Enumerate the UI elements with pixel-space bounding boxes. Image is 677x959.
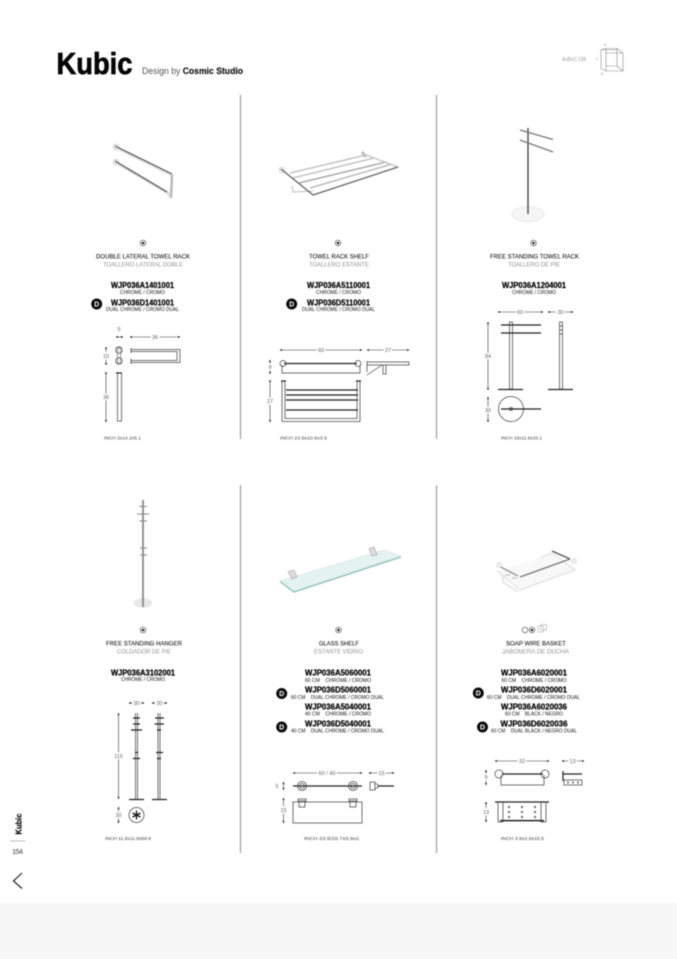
technical drawing: 36	[103, 395, 109, 401]
technical drawing: 10	[103, 354, 109, 360]
designer credit: Design by Cosmic Studio	[142, 66, 243, 76]
dimension key: B	[601, 72, 604, 76]
product codes: D	[480, 724, 485, 732]
finish icon	[140, 627, 146, 633]
dimension key: A	[604, 43, 607, 47]
product codes: 60 CM CHROME / CROMO	[502, 678, 567, 684]
technical drawing: 5	[275, 784, 279, 790]
product name: COLGADOR DE PIE	[117, 648, 171, 656]
product name: TOWEL RACK SHELF	[309, 254, 369, 260]
technical drawing: 9	[268, 365, 272, 371]
technical drawing: 36	[152, 335, 158, 341]
technical drawing: 84	[485, 354, 491, 360]
product codes: WJP036D6020036	[500, 720, 568, 728]
product codes: 60 CM DUAL CHROME / CROMO DUAL	[487, 695, 580, 701]
product codes: WJP036A5060001	[305, 668, 372, 678]
technical drawing: 30	[115, 813, 122, 819]
product codes: 60 CM BLACK / NEGRO	[505, 712, 563, 718]
inch dimensions: INCH 23.6/15.7x5.9x2	[304, 836, 359, 842]
inch dimensions: INCH 23.6x10.6x3.5	[280, 436, 327, 442]
technical drawing	[267, 348, 409, 422]
product codes: D	[279, 724, 284, 732]
product name: SOAP WIRE BASKET	[506, 640, 566, 648]
bottom band	[0, 903, 677, 959]
product name: TOALLERO DE PIE	[508, 262, 560, 268]
finish icon	[336, 627, 341, 633]
product codes: 60 CM CHROME / CROMO	[305, 678, 371, 684]
product codes: WJP036D6020001	[501, 686, 568, 694]
product code	[502, 281, 567, 296]
product name: GLASS SHELF	[319, 640, 359, 648]
inch dimensions: INCH 11.8x11.8x68.9	[105, 836, 151, 842]
dimension key: C	[596, 57, 599, 61]
product codes: WJP036D5110001	[307, 298, 371, 308]
technical drawing: 15	[280, 808, 287, 814]
product codes: 60 CM DUAL BLACK / NEGRO DUAL	[491, 728, 577, 734]
product codes: D	[476, 690, 481, 698]
technical drawing: 32	[519, 759, 525, 765]
technical drawing: 27	[385, 348, 391, 354]
product image: free standing towel rack	[512, 128, 553, 222]
product name: TOALLERO LATERAL DOBLE	[103, 262, 183, 268]
technical drawing	[483, 759, 584, 822]
dimension key: AxBxC CM	[562, 57, 586, 63]
inch dimensions: INCH 3.9x2.6x15.5	[501, 836, 544, 842]
product name: ESTANTE VIDRIO	[314, 648, 363, 656]
inch dimensions: INCH 2x14.2x5.1	[104, 436, 141, 442]
technical drawing: 15	[378, 771, 385, 777]
product name	[314, 640, 363, 656]
panel: free standing hanger	[105, 500, 182, 842]
finish icon	[531, 240, 536, 246]
technical drawing: 30	[557, 310, 564, 316]
product name: JABONERA DE DUCHA	[502, 648, 570, 656]
product codes: 40 CM CHROME / CROMO	[305, 712, 371, 718]
technical drawing: 30	[133, 701, 140, 707]
product codes: WJP036A5040001	[305, 702, 372, 712]
product codes: DUAL CHROME / CROMO DUAL	[302, 307, 375, 313]
product image: glass shelf	[280, 547, 401, 592]
product code: CHROME / CROMO	[512, 290, 556, 296]
product name	[502, 640, 570, 656]
product codes: D	[289, 302, 294, 308]
technical drawing: 30	[485, 408, 491, 414]
product code	[111, 668, 176, 683]
title: Kubic	[56, 46, 132, 81]
technical drawing: 13	[569, 759, 576, 765]
product name	[490, 254, 580, 268]
technical drawing	[103, 327, 180, 422]
technical drawing: 30	[156, 701, 163, 707]
product name	[309, 254, 369, 268]
technical drawing: 60 / 40	[319, 771, 335, 777]
technical drawing: 60	[517, 310, 523, 316]
product codes	[473, 668, 580, 734]
technical drawing: 13	[483, 810, 489, 816]
panel: soap wire basket	[473, 551, 584, 842]
product codes: CHROME / CROMO	[316, 290, 361, 296]
product codes: WJP036A6020001	[501, 668, 568, 678]
icon: back arrow	[14, 873, 22, 888]
technical drawing: 60	[318, 348, 324, 354]
panel: double lateral towel rack	[91, 144, 191, 442]
technical drawing	[485, 310, 573, 422]
panel: glass shelf	[275, 547, 401, 842]
product image: towel rack shelf	[279, 152, 398, 195]
technical drawing	[114, 701, 167, 823]
finish icons	[522, 624, 546, 633]
product codes: D	[94, 302, 99, 308]
product name	[96, 254, 191, 268]
dimension key	[562, 43, 623, 76]
product code: CHROME / CROMO	[121, 677, 165, 683]
panel: free standing towel rack	[485, 128, 580, 442]
product codes: WJP036D5060001	[305, 686, 372, 694]
product codes: WJP036A6020036	[501, 702, 568, 712]
finish icon	[140, 240, 146, 246]
product codes: 40 CM DUAL CHROME / CROMO DUAL	[291, 728, 384, 734]
product codes: CHROME / CROMO	[120, 290, 165, 296]
technical drawing: 27	[267, 399, 273, 405]
product codes	[276, 668, 384, 734]
technical drawing: 115	[114, 754, 123, 760]
page number: 154	[12, 847, 23, 856]
product name: FREE STANDING TOWEL RACK	[490, 254, 580, 260]
product codes: WJP036D5040001	[305, 720, 372, 728]
section name: Kubic	[14, 813, 24, 834]
product name	[106, 640, 182, 656]
product codes: 60 CM DUAL CHROME / CROMO DUAL	[291, 695, 384, 701]
product name: FREE STANDING HANGER	[106, 640, 182, 648]
product image: soap wire basket	[496, 551, 576, 592]
product codes	[91, 281, 179, 313]
product code: WJP036A1204001	[502, 281, 567, 290]
product codes	[286, 281, 375, 313]
product name: TOALLERO ESTANTE	[309, 262, 369, 268]
product name: DOUBLE LATERAL TOWEL RACK	[96, 254, 191, 260]
panel: towel rack shelf	[267, 152, 409, 442]
technical drawing: 5	[117, 327, 121, 333]
finish icon	[335, 240, 341, 246]
product codes: WJP036A1401001	[111, 281, 175, 290]
product codes: DUAL CHROME / CROMO DUAL	[106, 307, 179, 313]
product image: free standing hanger	[134, 500, 152, 608]
header	[56, 46, 243, 81]
technical drawing: 9	[484, 775, 488, 781]
product codes: D	[279, 691, 284, 698]
product codes: WJP036A5110001	[307, 281, 371, 290]
product code: WJP036A3102001	[111, 668, 176, 678]
product codes: WJP036D1401001	[111, 298, 175, 308]
product image: double lateral towel rack	[113, 144, 172, 198]
side tab	[10, 813, 26, 856]
technical drawing	[275, 771, 394, 823]
inch dimensions: INCH 15x11.8x33.1	[501, 436, 542, 442]
